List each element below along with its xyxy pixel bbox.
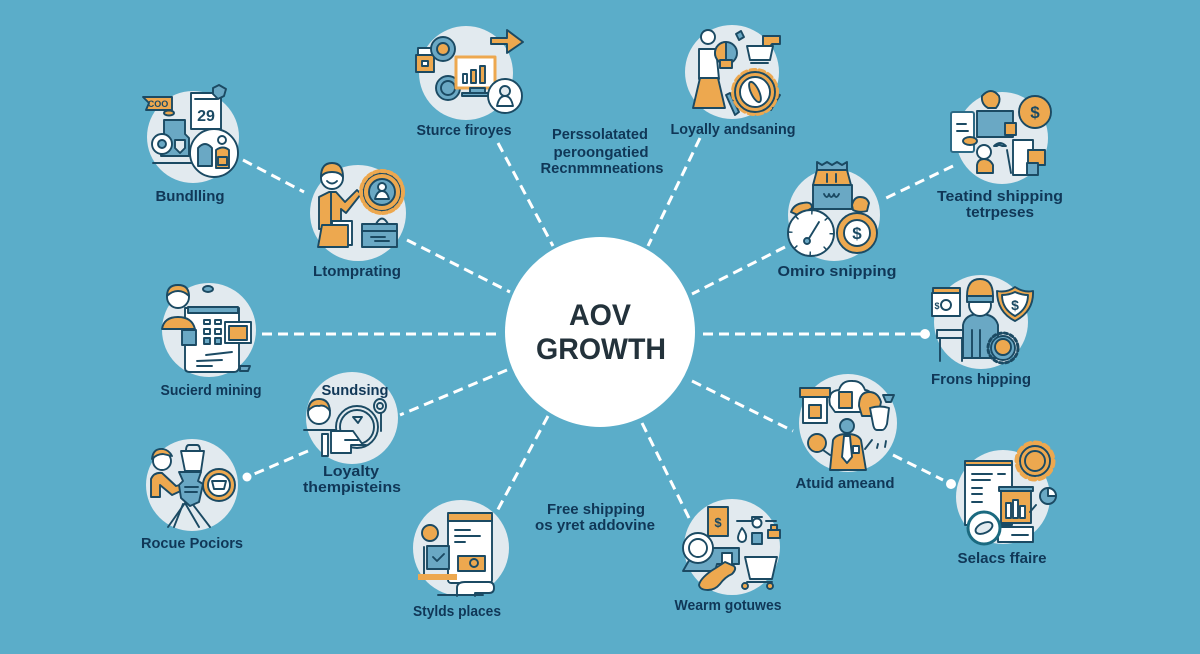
label: Rocue Pociors xyxy=(141,535,243,552)
label: tetrpeses xyxy=(966,204,1034,221)
icon: bundling: 29 xyxy=(197,108,215,125)
central hub: AOV Growth: AOV xyxy=(569,299,631,332)
icon: worker and shield: $ xyxy=(1011,297,1019,313)
label: Teatind shipping xyxy=(937,188,1063,205)
label: Frons hipping xyxy=(931,371,1031,388)
node: Selacs ffaire xyxy=(956,443,1056,567)
text block: personalized recommendations: peroongatied xyxy=(554,144,648,161)
text block: personalized recommendations: Perssolatated xyxy=(552,126,648,143)
node: Bundling xyxy=(143,85,239,205)
label: Stylds places xyxy=(413,603,501,620)
icon: presenter xyxy=(318,163,403,247)
icon: worker and shield xyxy=(932,279,1033,363)
label: Atuid ameand xyxy=(796,475,894,492)
node: Atuid ameand xyxy=(796,374,897,492)
label: Sucierd mining xyxy=(160,382,262,399)
label: Bundlling xyxy=(156,188,224,205)
text block: free shipping xyxy=(535,501,655,534)
icon: bin, person and coin xyxy=(151,445,235,527)
icon: customer and cart xyxy=(693,30,780,115)
node: Frons hipping xyxy=(931,275,1033,388)
text block: free shipping: Free shipping xyxy=(547,501,645,518)
label xyxy=(937,188,1063,221)
icon: target, hand and cart: $ xyxy=(714,515,722,530)
node: Loyally andsaning xyxy=(670,25,796,138)
label: Loyally andsaning xyxy=(670,121,796,138)
icon: shopper and phone: $ xyxy=(1030,103,1040,122)
label: Loyalty xyxy=(323,463,380,480)
icon: bundling xyxy=(143,85,238,177)
icon: document and person xyxy=(162,285,251,372)
node: Rocue Pociors xyxy=(141,439,243,552)
icon: agent and cloud xyxy=(800,381,894,470)
text block: free shipping: os yret addovine xyxy=(535,517,655,534)
label: Selacs ffaire xyxy=(958,550,1046,567)
label: Ltomprating xyxy=(313,263,401,280)
icon: package, stopwatch and coin: $ xyxy=(852,224,862,243)
label xyxy=(303,463,401,496)
central hub: AOV Growth xyxy=(505,237,695,427)
label: Sundsing xyxy=(322,382,388,399)
central hub: AOV Growth: GROWTH xyxy=(536,333,666,366)
label: Omiro snipping xyxy=(778,263,896,280)
node: Sucierd mining xyxy=(160,283,262,399)
node: Stylds places xyxy=(413,500,509,620)
label: thempisteins xyxy=(303,479,401,496)
icon: phone and shopping bag xyxy=(418,513,494,596)
label: Wearm gotuwes xyxy=(674,597,782,614)
text block: personalized recommendations: Recnmmneations xyxy=(540,160,664,177)
node: Teatind shipping xyxy=(937,91,1063,221)
node: Sundsing xyxy=(303,372,401,496)
node: Ltomprating xyxy=(310,163,406,280)
text block: personalized recommendations xyxy=(540,126,664,177)
icon: analytics monitor xyxy=(416,30,523,113)
icon: worker and shield: $ xyxy=(934,301,940,311)
label: Sturce firoyes xyxy=(416,122,512,139)
icon: document, gear and chart xyxy=(965,443,1056,544)
icon: bundling: COO xyxy=(148,99,168,109)
node: Omiro shipping xyxy=(778,162,896,280)
icon: clock and hand xyxy=(304,399,386,456)
node: Sturce firoyes xyxy=(416,26,523,139)
dashed connectors xyxy=(242,138,956,520)
node: Wearm gotuwes xyxy=(674,499,782,614)
